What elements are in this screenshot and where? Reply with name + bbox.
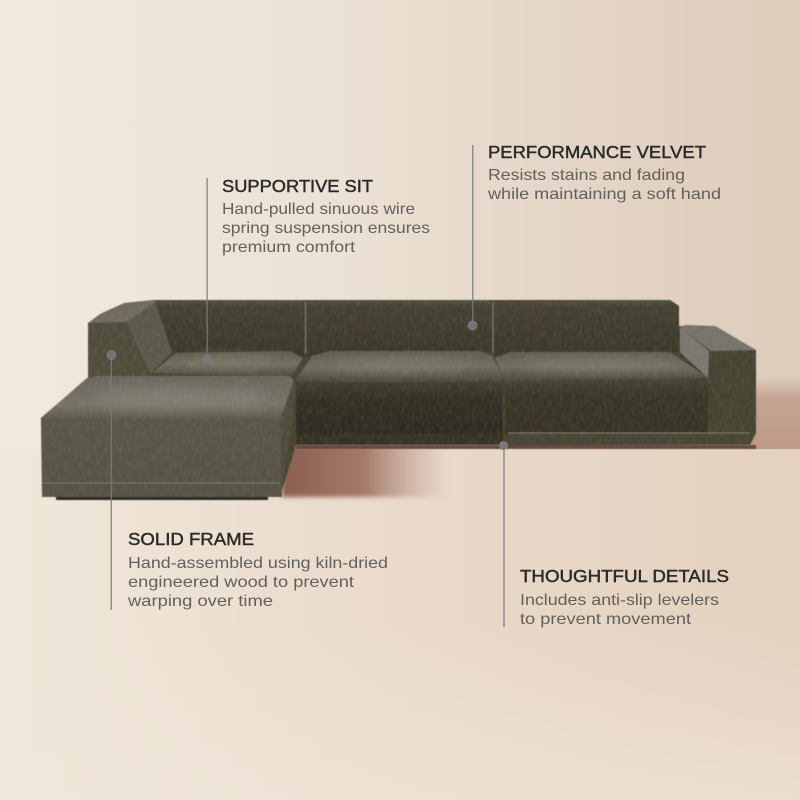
- sectional sofa: [41, 300, 756, 500]
- description: solid frame: [127, 555, 388, 610]
- heading: thoughtful details: THOUGHTFUL DETAILS: [520, 566, 729, 586]
- pointer line: thoughtful details: [499, 441, 508, 627]
- velvet texture: [41, 300, 756, 497]
- description: performance velvet: [487, 167, 721, 203]
- right arm: [680, 325, 756, 436]
- left arm: [88, 300, 172, 380]
- callout: supportive sit: [202, 176, 430, 364]
- description: performance velvet: while maintaining a soft hand: [487, 186, 721, 203]
- pointer line: performance velvet: [468, 145, 478, 330]
- description: supportive sit: spring suspension ensures: [222, 220, 430, 237]
- callout: solid frame: [106, 350, 388, 610]
- seat: left: [152, 351, 303, 378]
- description: performance velvet: Resists stains and fading: [488, 167, 685, 184]
- ottoman: [41, 376, 296, 500]
- description: supportive sit: premium comfort: [222, 239, 356, 256]
- description: solid frame: warping over time: [127, 593, 273, 610]
- seam highlights: [42, 302, 750, 483]
- description: supportive sit: Hand-pulled sinuous wire: [222, 201, 415, 218]
- heading: solid frame: SOLID FRAME: [128, 529, 254, 549]
- back cushion: middle: [306, 300, 492, 356]
- heading: performance velvet: PERFORMANCE VELVET: [488, 142, 706, 162]
- description: supportive sit: [222, 201, 430, 256]
- description: solid frame: engineered wood to prevent: [128, 574, 355, 591]
- pointer line: solid frame: [106, 350, 116, 610]
- right seat: [495, 352, 750, 446]
- middle seat: [296, 351, 503, 445]
- callout: performance velvet: [468, 142, 721, 330]
- floor shadow under sofa: [282, 376, 800, 497]
- back cushion: left: [155, 300, 305, 356]
- description: thoughtful details: Includes anti-slip levelers: [520, 592, 719, 609]
- velvet highlights: [95, 357, 675, 409]
- description: thoughtful details: [520, 592, 719, 628]
- heading: supportive sit: SUPPORTIVE SIT: [222, 176, 373, 196]
- pointer line: supportive sit: [202, 178, 212, 364]
- callout: thoughtful details: [499, 441, 729, 628]
- description: thoughtful details: to prevent movement: [520, 611, 692, 628]
- description: solid frame: Hand-assembled using kiln-dried: [128, 555, 388, 572]
- back cushion: right: [494, 300, 679, 356]
- middle base strip: [296, 433, 502, 445]
- sofa silhouette: [41, 300, 756, 497]
